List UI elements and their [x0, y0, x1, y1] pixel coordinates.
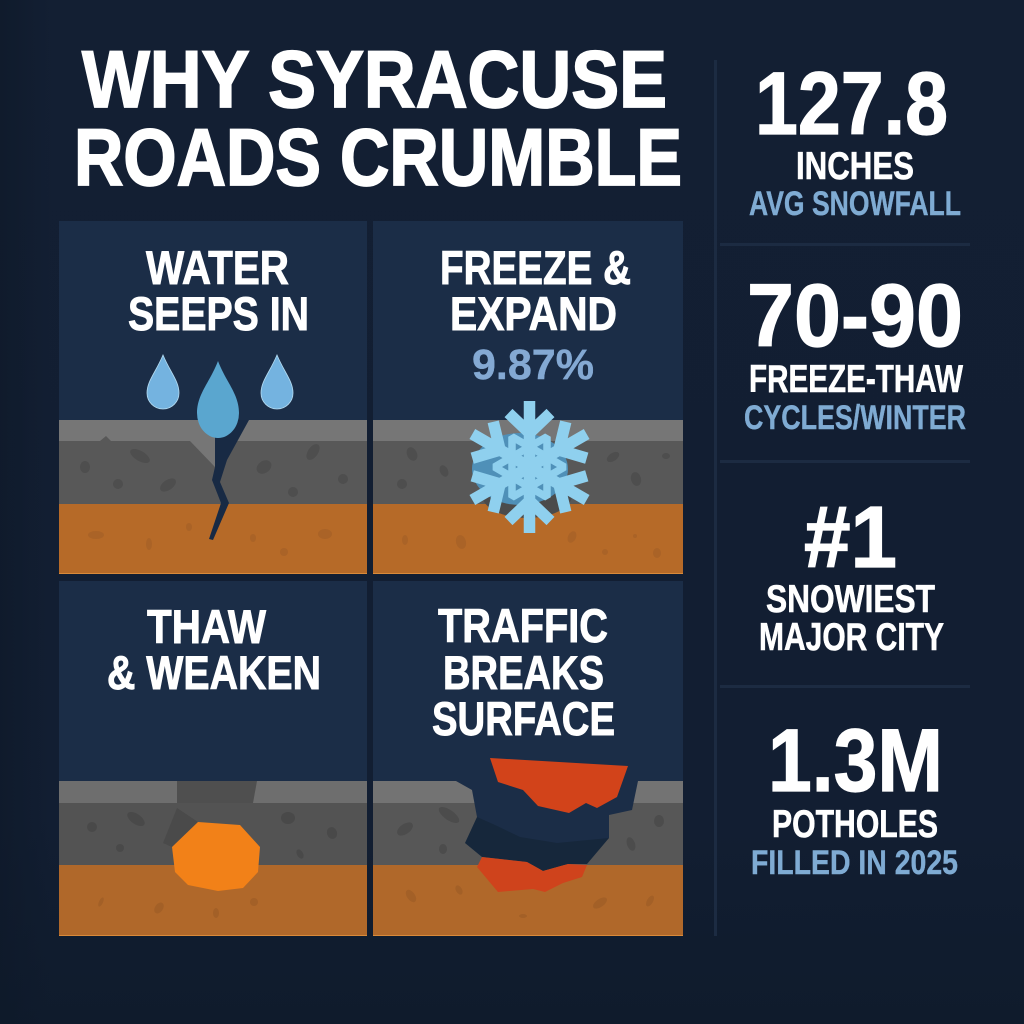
stat: freeze-thaw cycles: 70-90: [747, 265, 963, 365]
stat: freeze-thaw cycles: FREEZE-THAW: [749, 358, 963, 401]
heading: traffic breaks surface: SURFACE: [432, 692, 615, 745]
title: ROADS CRUMBLE: [74, 113, 682, 203]
heading: water seeps in: [128, 241, 309, 340]
pothole: [456, 750, 638, 892]
stat: freeze-thaw cycles: [744, 265, 966, 437]
stat: 9.87%: 9.87%: [472, 341, 594, 389]
title: WHY SYRACUSE: [82, 35, 667, 125]
heading: traffic breaks surface: [432, 599, 615, 745]
stat: freeze-thaw cycles: CYCLES/WINTER: [744, 399, 966, 437]
stat: snowfall: INCHES: [796, 145, 914, 188]
heading: water seeps in: SEEPS IN: [128, 287, 309, 340]
heading: freeze and expand: [440, 241, 631, 340]
stat: snowiest city: #1: [804, 489, 897, 586]
stat: snowiest city: [759, 489, 944, 659]
heading: water seeps in: WATER: [146, 241, 289, 294]
panel: water seeps in: [59, 221, 367, 574]
heading: thaw and weaken: THAW: [147, 600, 267, 653]
stat: potholes: [751, 710, 958, 882]
stat: potholes: 1.3M: [768, 710, 943, 810]
icon: snowflake: [462, 401, 597, 533]
ice void: [472, 433, 572, 518]
heading: freeze and expand: FREEZE &: [440, 241, 631, 294]
heading: thaw and weaken: [107, 600, 321, 699]
stat: snowiest city: MAJOR CITY: [759, 616, 944, 659]
heading: thaw and weaken: & WEAKEN: [107, 646, 321, 699]
crack: [209, 420, 249, 540]
heading: freeze and expand: EXPAND: [450, 287, 617, 340]
stat: potholes: FILLED IN 2025: [751, 844, 958, 882]
stat: snowfall: [749, 53, 961, 223]
heading: traffic breaks surface: BREAKS: [443, 646, 604, 699]
panel: freeze and expand: [373, 221, 683, 574]
title: [74, 35, 682, 203]
icon: water drops: [147, 355, 293, 438]
orange void: [172, 822, 260, 891]
stat: snowfall: 127.8: [755, 53, 948, 153]
stat: snowiest city: SNOWIEST: [766, 578, 935, 621]
panel: traffic breaks surface: [373, 581, 683, 936]
heading: traffic breaks surface: TRAFFIC: [438, 599, 608, 652]
stat: snowfall: AVG SNOWFALL: [749, 185, 961, 223]
sidebar dividers: [714, 60, 970, 936]
panel: thaw and weaken: [59, 581, 367, 936]
stat: potholes: POTHOLES: [772, 803, 938, 846]
